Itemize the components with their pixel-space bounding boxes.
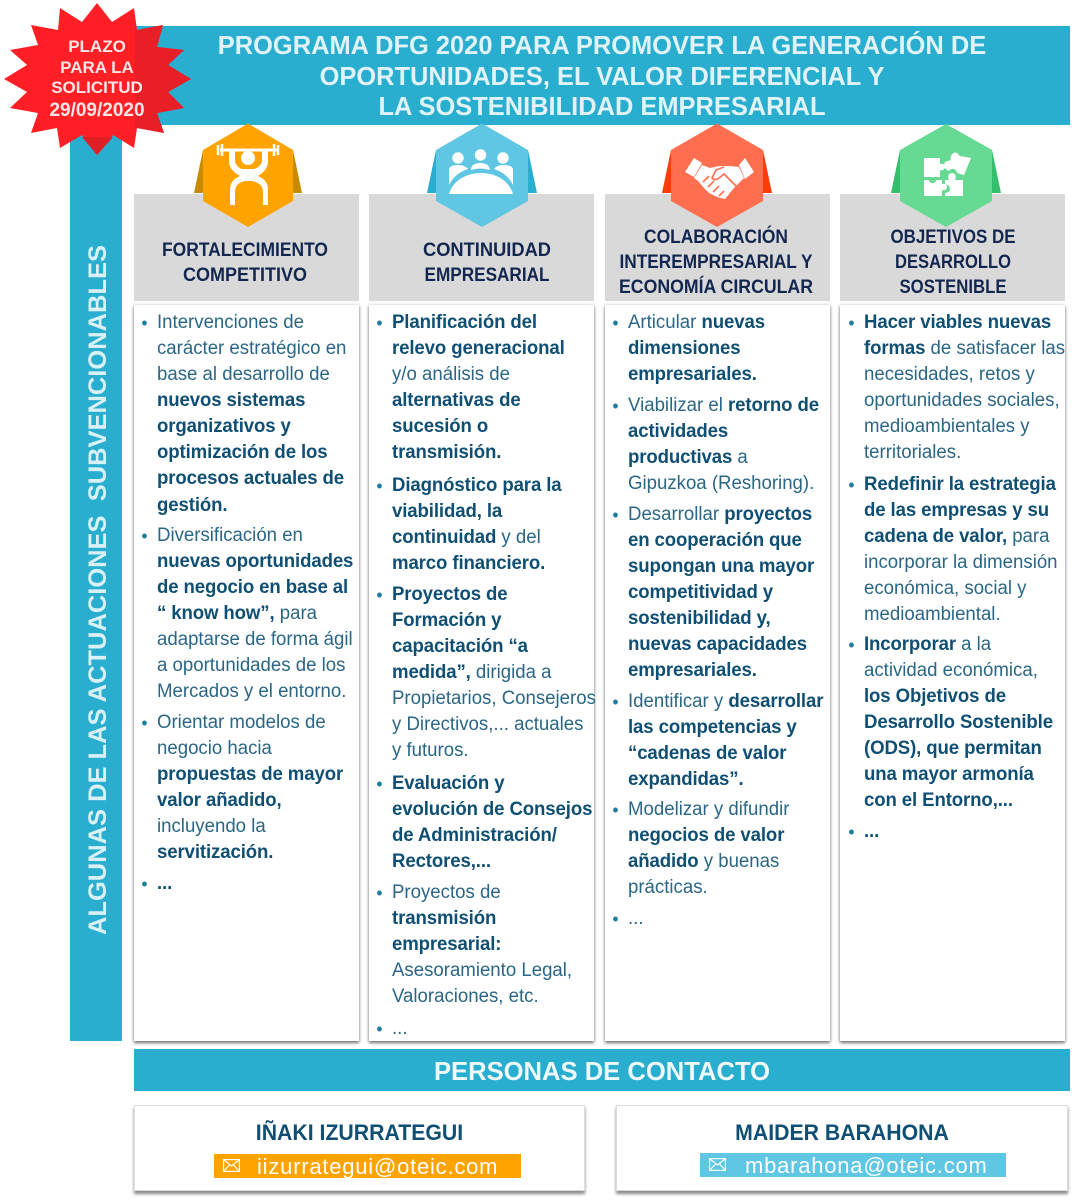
text block: column 2 bullets: Diagnóstico para la	[392, 474, 562, 496]
text block: column 1 bullets	[141, 312, 353, 894]
text block: column 2 bullets: Formación y	[392, 610, 501, 631]
text block: column 1 bullets: nuevos sistemas	[157, 390, 305, 411]
panel: objetivos header: OBJETIVOS DE	[890, 227, 1016, 248]
panel: objetivos header	[840, 194, 1065, 301]
panel: continuidad empresarial header: CONTINUIDAD	[423, 240, 551, 261]
text block: column 2 bullets: relevo generacional	[392, 338, 565, 359]
text block: column 4 bullets: cadena de valor, para	[864, 526, 1049, 547]
text block: column 4 bullets: económica, social y	[864, 578, 1026, 599]
text block: column 1 bullets: Intervenciones de	[157, 312, 304, 332]
text block: column 2 bullets: evolución de Consejos	[392, 799, 592, 820]
text block: column 1 bullets: Mercados y el entorno.	[157, 681, 346, 702]
text block: column 2 bullets: Valoraciones, etc.	[392, 986, 539, 1007]
text block: column 3 bullets: añadido y buenas	[628, 851, 779, 872]
text block: column 3 bullets: actividades	[628, 421, 728, 442]
text block: column 2 bullets: viabilidad, la	[392, 501, 502, 522]
panel: column 1	[134, 305, 359, 1041]
deadline starburst: 29/09/2020	[49, 100, 145, 121]
text block: column 3 bullets: las competencias y	[628, 717, 797, 738]
text block: column 1 bullets: negocio hacia	[157, 738, 272, 759]
text block: column 2 bullets: transmisión.	[392, 442, 501, 463]
title banner: PROGRAMA DFG 2020 PARA PROMOVER LA GENERACIÓN DE	[218, 32, 986, 60]
text block: column 1 bullets: base al desarrollo de	[157, 364, 330, 385]
text block: column 2 bullets: sucesión o	[392, 416, 488, 437]
text: •	[612, 312, 619, 332]
text: •	[141, 526, 148, 546]
contact card: Iñaki	[134, 1105, 585, 1191]
text block: column 2 bullets: Rectores,...	[392, 851, 491, 872]
text block: column 4 bullets: Desarrollo Sostenible	[864, 712, 1053, 733]
text block: column 1 bullets: incluyendo la	[157, 816, 266, 837]
text block: column 4 bullets: incorporar la dimensión	[864, 552, 1058, 573]
email: Iñaki: iizurrategui@oteic.com	[257, 1154, 498, 1179]
text block: column 3 bullets: Identificar y desarrollar	[628, 690, 823, 712]
deadline starburst: SOLICITUD	[51, 78, 143, 97]
text block: column 1 bullets: ...	[157, 872, 172, 894]
title banner: LA SOSTENIBILIDAD EMPRESARIAL	[378, 93, 826, 121]
text block: column 3 bullets: competitividad y	[628, 582, 773, 603]
text block: column 3 bullets: Articular nuevas	[628, 312, 765, 332]
text block: column 3 bullets: productivas a	[628, 447, 748, 468]
text block: column 3 bullets: Modelizar y difundir	[628, 798, 789, 820]
text block: column 1 bullets: valor añadido,	[157, 790, 282, 811]
text block: column 1 bullets: Orientar modelos de	[157, 712, 326, 732]
text block: column 3 bullets: “cadenas de valor	[628, 743, 786, 764]
panel: colaboracion header: ECONOMÍA CIRCULAR	[619, 276, 813, 298]
text block: column 2 bullets: capacitación “a	[392, 636, 528, 657]
text block: column 4 bullets: necesidades, retos y	[864, 364, 1035, 385]
text block: column 1 bullets: adaptarse de forma ágil	[157, 629, 353, 650]
panel: column 3	[605, 305, 830, 1041]
icon: puzzle hexagon	[891, 124, 1001, 227]
text: •	[141, 312, 148, 332]
text: •	[376, 882, 383, 902]
text block: column 4 bullets: Incorporar a la	[864, 634, 991, 654]
contact card: Maider: MAIDER BARAHONA	[735, 1120, 949, 1145]
text block: column 2 bullets	[376, 312, 596, 1038]
text block: column 3 bullets: nuevas capacidades	[628, 634, 807, 655]
text: •	[848, 312, 855, 332]
panel: objetivos header: SOSTENIBLE	[900, 277, 1006, 298]
text block: column 1 bullets: carácter estratégico en	[157, 338, 346, 359]
text block: column 4 bullets: una mayor armonía	[864, 764, 1034, 785]
text: •	[612, 396, 619, 416]
text block: column 2 bullets: Propietarios, Consejeros	[392, 688, 596, 709]
text block: column 4 bullets: territoriales.	[864, 442, 961, 463]
text: •	[612, 908, 619, 928]
text block: column 3 bullets: en cooperación que	[628, 530, 802, 551]
text: •	[612, 800, 619, 820]
text block: column 4 bullets: medioambiental.	[864, 604, 1001, 625]
text block: column 2 bullets: transmisión	[392, 908, 496, 929]
panel: fortalecimiento competitivo header: COMPETITIVO	[183, 265, 307, 286]
text block: column 2 bullets: Proyectos de	[392, 882, 501, 902]
text block: column 3 bullets: expandidas”.	[628, 769, 744, 790]
deadline starburst	[4, 3, 191, 155]
icon: meeting hexagon	[427, 124, 537, 227]
text: •	[376, 312, 383, 332]
text block: column 3 bullets: Gipuzkoa (Reshoring).	[628, 473, 814, 494]
text block: column 4 bullets: oportunidades sociales,	[864, 390, 1060, 411]
text block: column 3 bullets: Viabilizar el retorno de	[628, 394, 819, 416]
text: •	[376, 584, 383, 604]
text block: column 2 bullets: continuidad y del	[392, 527, 541, 548]
text block: column 4 bullets: los Objetivos de	[864, 686, 1006, 707]
text block: column 1 bullets: servitización.	[157, 842, 273, 863]
text block: column 2 bullets: Proyectos de	[392, 584, 508, 604]
text block: column 3 bullets: supongan una mayor	[628, 556, 814, 577]
title banner: OPORTUNIDADES, EL VALOR DIFERENCIAL Y	[320, 63, 884, 91]
text block: column 4 bullets: actividad económica,	[864, 660, 1038, 681]
text block: column 1 bullets: propuestas de mayor	[157, 764, 343, 785]
email: Maider: mbarahona@oteic.com	[745, 1153, 988, 1178]
text block: column 1 bullets: “ know how”, para	[157, 603, 317, 624]
text block: column 3 bullets	[612, 312, 824, 928]
text: •	[376, 476, 383, 496]
text block: column 1 bullets: de negocio en base al	[157, 577, 348, 598]
icon: weightlifter hexagon	[194, 124, 302, 227]
text block: column 2 bullets: Planificación del	[392, 312, 537, 332]
text block: column 4 bullets	[848, 312, 1065, 842]
panel: continuidad empresarial header: EMPRESARIAL	[424, 265, 550, 286]
text block: column 1 bullets: a oportunidades de los	[157, 655, 345, 676]
contact heading band: PERSONAS DE CONTACTO	[434, 1058, 770, 1086]
panel: colaboracion header: COLABORACIÓN	[644, 226, 788, 248]
text block: column 4 bullets: de las empresas y su	[864, 500, 1049, 521]
text block: column 3 bullets: empresariales.	[628, 660, 757, 681]
panel: colaboracion header: INTEREMPRESARIAL Y	[620, 252, 813, 273]
text block: column 1 bullets: gestión.	[157, 495, 227, 516]
panel: fortalecimiento competitivo header: FORTALECIMIENTO	[162, 240, 328, 261]
deadline starburst: PARA LA	[60, 58, 134, 77]
text block: column 2 bullets: de Administración/	[392, 825, 557, 846]
text block: column 2 bullets: Asesoramiento Legal,	[392, 960, 572, 981]
contact card: Maider	[616, 1105, 1068, 1191]
text: •	[376, 774, 383, 794]
text block: column 4 bullets: (ODS), que permitan	[864, 738, 1042, 759]
text block: column 2 bullets: ...	[392, 1018, 408, 1038]
panel: continuidad empresarial header	[369, 194, 594, 301]
text block: column 3 bullets: sostenibilidad y,	[628, 608, 771, 629]
text: •	[848, 822, 855, 842]
text block: column 3 bullets: Desarrollar proyectos	[628, 504, 812, 524]
text block: column 3 bullets: dimensiones	[628, 338, 741, 359]
contact heading band	[134, 1049, 1070, 1091]
text block: column 3 bullets: ...	[628, 908, 644, 928]
left vertical band: ALGUNAS DE LAS ACTUACIONES SUBVENCIONABLES	[84, 245, 112, 935]
text block: column 4 bullets: medioambientales y	[864, 416, 1030, 437]
text block: column 1 bullets: procesos actuales de	[157, 468, 344, 489]
contact card: Iñaki: IÑAKI IZURRATEGUI	[256, 1120, 463, 1145]
text block: column 4 bullets: ...	[864, 820, 879, 842]
text block: column 2 bullets: medida”, dirigida a	[392, 662, 551, 683]
text block: column 1 bullets: nuevas oportunidades	[157, 551, 353, 572]
panel: colaboracion header	[605, 194, 830, 301]
text: •	[612, 504, 619, 524]
title banner	[135, 26, 1070, 125]
text block: column 2 bullets: Evaluación y	[392, 772, 504, 794]
text block: column 3 bullets: negocios de valor	[628, 825, 784, 846]
text: •	[848, 474, 855, 494]
text: •	[848, 634, 855, 654]
text block: column 4 bullets: con el Entorno,...	[864, 790, 1013, 811]
text block: column 2 bullets: empresarial:	[392, 934, 501, 955]
text block: column 2 bullets: marco financiero.	[392, 553, 545, 574]
panel: column 4	[840, 305, 1065, 1041]
text: •	[612, 692, 619, 712]
panel: objetivos header: DESARROLLO	[895, 252, 1011, 273]
deadline starburst: PLAZO	[68, 37, 126, 56]
text: •	[141, 874, 148, 894]
text block: column 3 bullets: empresariales.	[628, 364, 757, 385]
text block: column 2 bullets: y/o análisis de	[392, 364, 510, 385]
text: •	[141, 712, 148, 732]
text block: column 4 bullets: Hacer viables nuevas	[864, 312, 1051, 332]
text block: column 2 bullets: y futuros.	[392, 740, 469, 761]
text block: column 4 bullets: Redefinir la estrategia	[864, 474, 1056, 494]
icon: handshake hexagon	[662, 124, 772, 227]
text block: column 2 bullets: alternativas de	[392, 390, 521, 411]
text: •	[376, 1018, 383, 1038]
text block: column 4 bullets: formas de satisfacer las	[864, 338, 1065, 359]
text block: column 2 bullets: y Directivos,... actuales	[392, 714, 583, 735]
text block: column 1 bullets: Diversificación en	[157, 524, 303, 546]
left vertical band	[70, 135, 122, 1041]
text block: column 3 bullets: prácticas.	[628, 877, 708, 898]
text block: column 1 bullets: optimización de los	[157, 442, 328, 463]
text block: column 1 bullets: organizativos y	[157, 416, 291, 437]
panel: fortalecimiento competitivo header	[134, 194, 359, 301]
panel: column 2	[369, 305, 594, 1041]
